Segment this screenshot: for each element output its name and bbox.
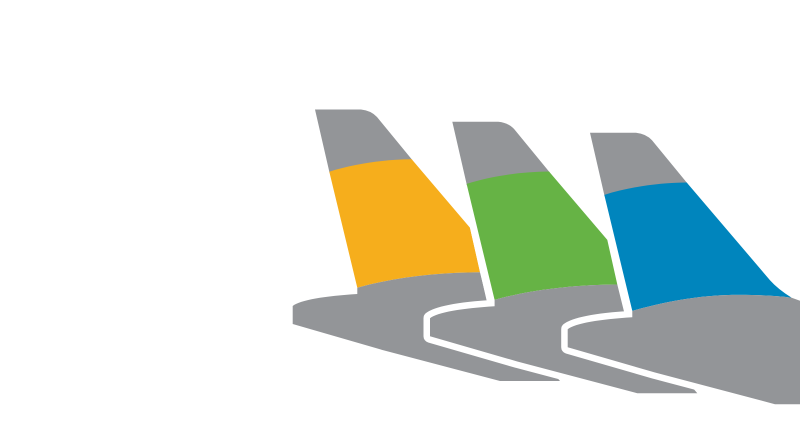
tail 1: orange	[293, 110, 560, 381]
tail 2: green	[430, 122, 697, 393]
tail 1 gray stabilizer	[293, 272, 560, 381]
tail 3 blue band	[604, 182, 792, 311]
tail 3: blue	[568, 133, 800, 404]
tail 3 gray fin tip	[590, 133, 688, 196]
tail 1 gray fin tip	[315, 110, 413, 173]
tail 2 gray fin tip	[452, 122, 550, 185]
tail 2 gray stabilizer	[430, 284, 697, 393]
tail 3 gray stabilizer	[568, 295, 800, 404]
tail 2 green band	[467, 172, 617, 300]
tail 1 orange band	[329, 159, 480, 288]
